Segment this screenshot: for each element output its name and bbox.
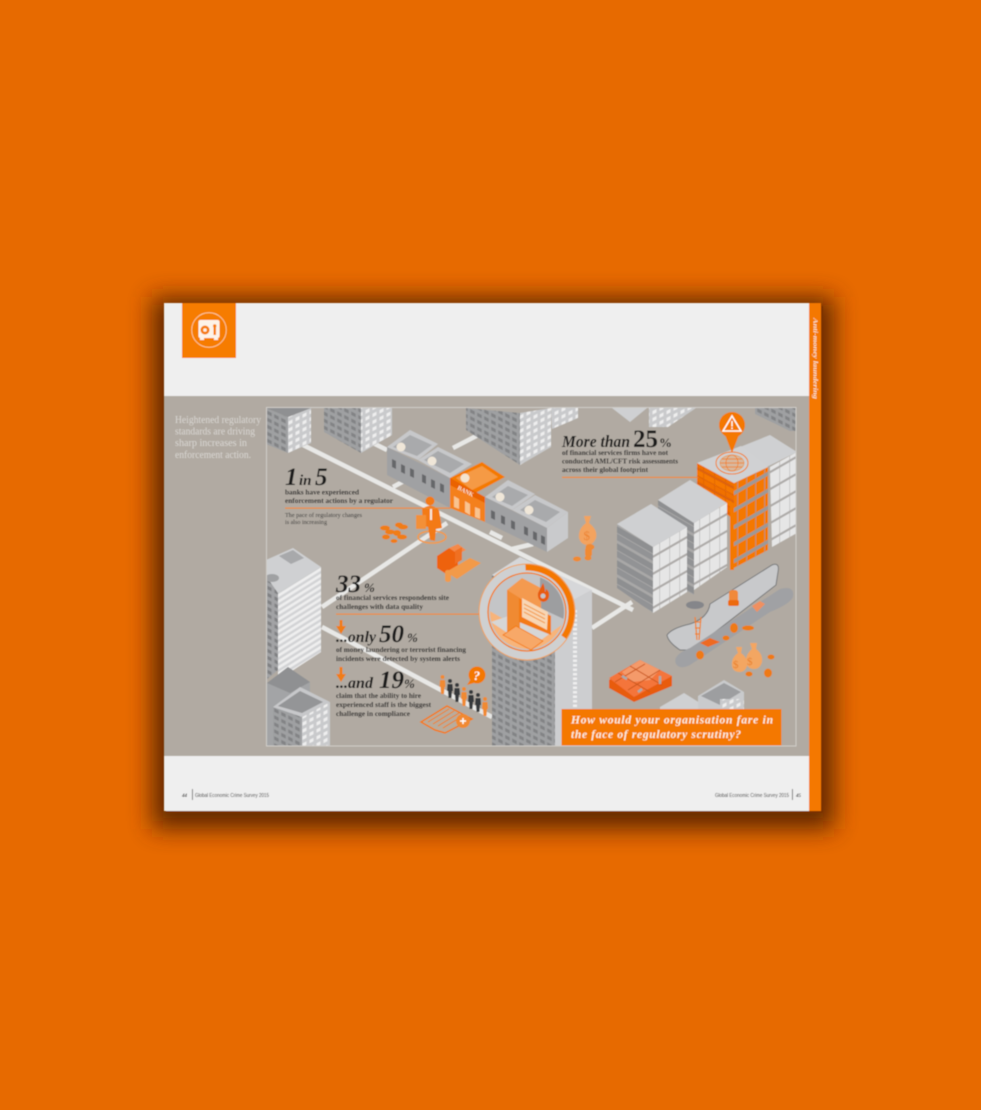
orange bank: BANK [456,485,475,499]
roads [303,433,633,717]
stat: more than 25%: % [659,435,672,450]
stat: 33%: 33 [335,571,361,598]
top-row buildings [266,408,796,466]
stat: 1 in 5: 1 [285,464,298,491]
stat: 1 in 5: in [299,473,312,489]
stat: and 19%: claim that the ability to hire [336,691,422,700]
middle office block [658,480,727,595]
inner frame [266,408,796,746]
footer left [181,789,269,800]
stat: 1 in 5: is also increasing [285,520,327,526]
intro text: Heightened regulatory [175,415,261,426]
stat: 33%: challenges with data quality [336,602,423,611]
queue of people [440,675,488,716]
stat: 33%: % [364,580,375,595]
stat: only 50%: ...only [336,629,377,646]
businessman [416,496,446,543]
sewer cutaway [667,564,793,667]
page shadow [152,297,834,829]
footer right: Global Economic Crime Survey 2015 [715,793,789,799]
icon: question bubble [467,666,486,685]
icon: safe badge [182,303,236,358]
orange side tab: Anti-money laundering [812,317,818,399]
orange bank [450,462,505,522]
intro text [175,415,261,461]
brochure spread [164,303,823,813]
stat: 33% [335,571,479,615]
warning pin and globe [716,412,748,474]
money bags and coins right [732,643,774,678]
low buildings bottom right [660,680,744,712]
footer right [715,789,802,800]
orange side tab [809,303,821,811]
stacked banknotes and gold bar [437,544,481,582]
stat: and 19% [336,667,431,718]
stat: more than 25%: conducted AML/CFT risk assessments [562,456,678,466]
front office block [617,504,687,613]
stat: and 19%: experienced staff is the biggest [336,700,431,709]
stat: only 50%: % [407,630,418,645]
stat: more than 25%: across their global footprint [562,465,648,474]
callout: question [562,709,782,746]
stat: only 50%: incidents were detected by system alerts [336,654,460,663]
isometric city illustration [265,400,797,746]
stat: more than 25%: 25 [633,426,658,453]
intro text: standards are driving [175,426,255,438]
footer left: Global Economic Crime Survey 2015 [195,793,269,799]
callout: question: How would your organisation fare in [570,714,773,726]
stat: only 50% [336,621,466,663]
icon: arrow down [336,667,346,682]
far right back building [735,434,796,548]
row of grey banks, left [387,430,472,508]
stat: and 19%: 19 [379,667,404,694]
intro text: sharp increases in [175,438,247,449]
stat: more than 25%: More than [561,432,630,451]
footer left: 44 [181,794,188,799]
stat: 1 in 5: banks have experienced [285,488,360,496]
money bags and coins right: $ [747,656,753,668]
orange-clad tower [697,446,768,570]
stat: 33%: of financial services respondents site [336,593,450,602]
data desk magnifier circle [479,564,575,660]
stat: 1 in 5: enforcement actions by a regulator [285,496,394,505]
left tall stripe building [265,548,321,680]
money bag and coins near bank: $ [584,528,590,543]
left low buildings [267,667,330,746]
icon: rejected document [421,706,472,733]
stat: and 19%: ...and [336,675,374,692]
footer right: 45 [795,794,802,799]
grey illustration panel [164,396,809,756]
stat: more than 25% [561,426,698,478]
stat: more than 25%: of financial services firms have not [562,448,668,457]
money bags and coins right: $ [733,659,739,671]
stat: 1 in 5: 5 [315,464,328,491]
icon: question bubble: ? [474,668,480,683]
stat: only 50%: of money laundering or terrorist financing [336,645,466,654]
callout: question: the face of regulatory scrutiny? [571,729,741,741]
stat: and 19%: challenge in compliance [336,709,411,718]
money bag and coins near bank [573,516,596,562]
pile of banknotes [609,660,672,702]
icon: arrow down [336,620,346,634]
row of grey banks, right [485,480,568,552]
stat: only 50%: 50 [379,621,404,648]
stat: 1 in 5: The pace of regulatory changes [285,512,363,519]
stat: and 19%: % [404,676,415,691]
stat: 1 in 5 [285,464,451,526]
central tower [492,557,592,746]
coins pile [380,522,408,543]
intro text: enforcement action. [175,450,251,461]
